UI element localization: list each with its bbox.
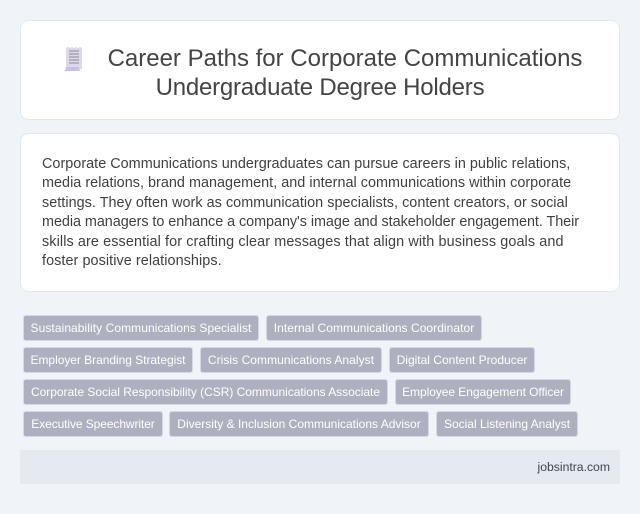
tag: Employer Branding Strategist <box>31 353 185 367</box>
tag <box>23 347 193 373</box>
tag <box>436 411 578 437</box>
tag <box>395 379 571 405</box>
tag <box>23 379 388 405</box>
tag: Corporate Social Responsibility (CSR) Communications Associate <box>31 385 380 399</box>
tag <box>266 315 482 341</box>
tag <box>389 347 535 373</box>
description text <box>42 156 579 269</box>
description text: skills are essential for crafting clear messages that align with business goals and <box>42 234 564 250</box>
header panel <box>20 20 620 120</box>
tag <box>169 411 429 437</box>
tag <box>23 315 259 341</box>
tag: Executive Speechwriter <box>31 417 155 431</box>
tag: Diversity & Inclusion Communications Advisor <box>177 417 421 431</box>
footer bar <box>20 450 620 484</box>
icon: document scroll <box>64 47 82 71</box>
description text: settings. They often work as communication specialists, content creators, or social <box>42 194 568 210</box>
description text: Corporate Communications undergraduates can pursue careers in public relations, <box>42 156 570 172</box>
description text: media managers to enhance a company's image and stakeholder engagement. Their <box>42 214 579 230</box>
tag: Social Listening Analyst <box>444 417 570 431</box>
description text: foster positive relationships. <box>42 253 222 269</box>
tag: Employee Engagement Officer <box>402 385 564 399</box>
tag: Sustainability Communications Specialist <box>31 321 251 335</box>
tag <box>200 347 382 373</box>
tag: Internal Communications Coordinator <box>274 321 474 335</box>
description text: media relations, brand management, and internal communications within corporate <box>42 175 571 191</box>
footer source text: jobsintra.com <box>538 460 610 474</box>
tag: Crisis Communications Analyst <box>208 353 374 367</box>
tag <box>23 411 163 437</box>
title: Undergraduate Degree Holders <box>156 74 484 100</box>
tag: Digital Content Producer <box>397 353 527 367</box>
title: Career Paths for Corporate Communications <box>108 45 582 72</box>
description panel <box>20 133 620 292</box>
title <box>108 45 582 100</box>
